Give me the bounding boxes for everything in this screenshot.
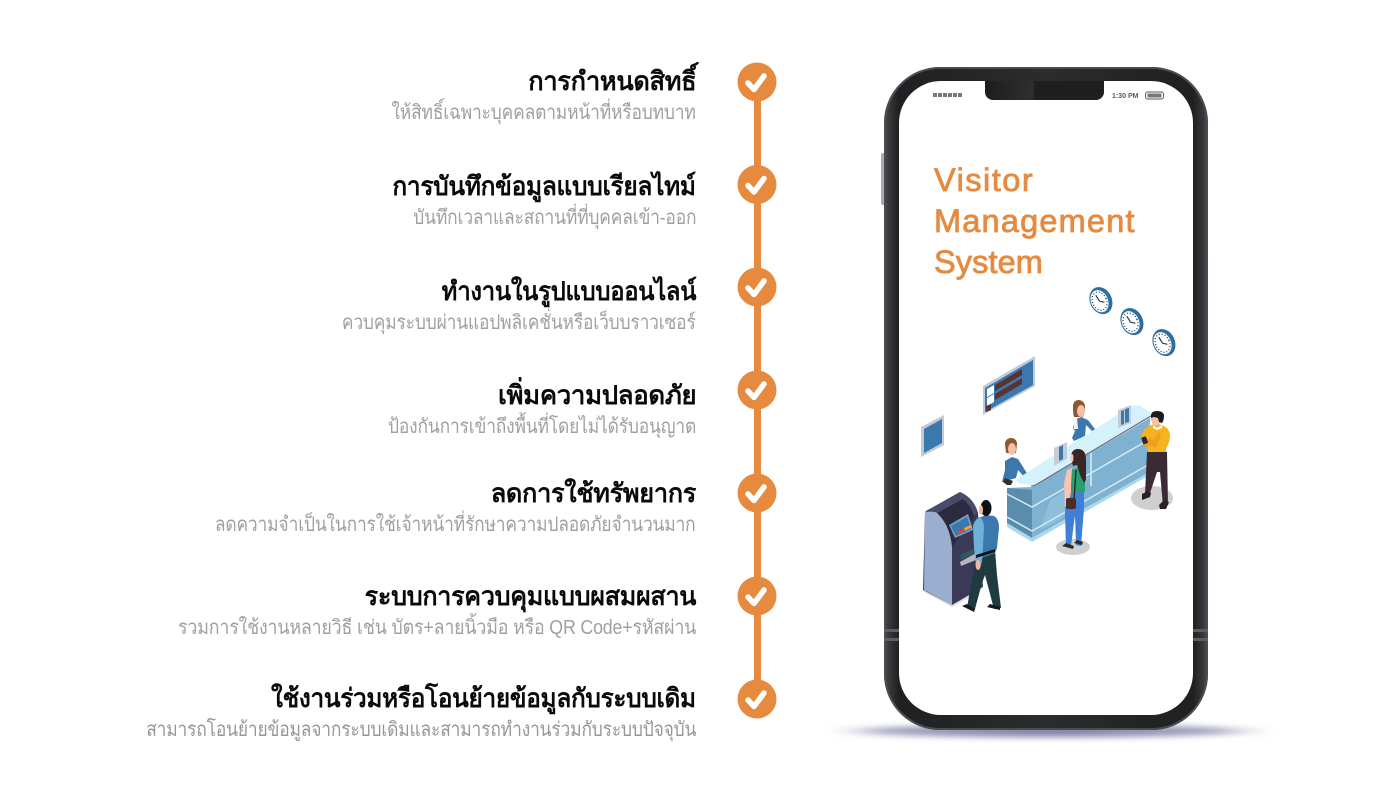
feature 2: real-time log: บันทึกเวลาและสถานที่ที่บุคคลเข้า-ออก — [413, 207, 696, 229]
feature 2: real-time log — [393, 171, 696, 230]
wall picture — [921, 415, 944, 457]
check icon 6 — [738, 576, 776, 616]
check icon 1 — [738, 62, 776, 102]
phone mockup — [881, 67, 1208, 730]
feature 7: integration — [146, 682, 696, 742]
signal dots — [933, 93, 962, 97]
desk sign right — [1118, 405, 1131, 428]
phone body — [884, 67, 1208, 730]
check icon 4 — [738, 370, 776, 410]
timeline with check icons — [738, 62, 776, 718]
feature 1: permissions — [392, 62, 699, 124]
feature 4: security — [388, 377, 696, 438]
desk sign left — [1054, 442, 1067, 466]
battery — [1146, 92, 1164, 99]
feature 6: hybrid control: ระบบการควบคุมแบบผสมผสาน — [365, 581, 696, 611]
title: Management — [934, 203, 1136, 239]
clock text: 1:30 PM — [1112, 93, 1139, 100]
feature list — [146, 62, 699, 742]
feature 5: resources: ลดความจำเป็นในการใช้เจ้าหน้าที่รักษาความปลอดภัยจำนวนมาก — [215, 514, 696, 536]
man at kiosk — [962, 500, 1001, 612]
feature 7: integration: สามารถโอนย้ายข้อมูลจากระบบเดิมและสามารถทำงานร่วมกับระบบปัจจุบัน — [146, 719, 696, 741]
woman in green top — [1056, 449, 1090, 555]
check icon 3 — [738, 268, 776, 306]
phone shadow — [822, 723, 1278, 739]
clock 2 — [1116, 304, 1148, 339]
feature 6: hybrid control — [178, 581, 696, 639]
clock 3 — [1148, 325, 1180, 360]
feature 3: online — [342, 276, 696, 334]
feature 4: security: ป้องกันการเข้าถึงพื้นที่โดยไม่ได้รับอนุญาต — [388, 416, 696, 438]
feature 2: real-time log: การบันทึกข้อมูลแบบเรียลไทม์ — [393, 171, 696, 201]
wall information board — [983, 356, 1035, 415]
kiosk machine — [922, 492, 983, 607]
feature 1: permissions: ให้สิทธิ์เฉพาะบุคคลตามหน้าที่หรือบทบาท — [392, 102, 696, 124]
reception illustration — [921, 283, 1180, 612]
receptionist front — [1002, 438, 1030, 485]
reception desk — [1007, 405, 1152, 542]
side button — [881, 153, 886, 205]
feature 5: resources: ลดการใช้ทรัพยากร — [491, 478, 696, 508]
notch — [985, 81, 1104, 100]
feature 3: online: ทำงานในรูปแบบออนไลน์ — [441, 276, 696, 306]
feature 7: integration: ใช้งานร่วมหรือโอนย้ายข้อมูลกับระบบเดิม — [271, 683, 696, 713]
check icon 7 — [738, 680, 776, 718]
phone screen — [899, 81, 1193, 715]
title: Visitor — [934, 162, 1034, 198]
man in yellow sweater — [1131, 411, 1173, 510]
clock 1 — [1085, 283, 1117, 318]
feature 6: hybrid control: รวมการใช้งานหลายวิธี เช่น บัตร+ลายนิ้วมือ หรือ QR Code+รหัสผ่าน — [178, 617, 696, 639]
phone rim highlight — [885, 68, 1207, 729]
timeline line — [754, 82, 761, 699]
check icon 5 — [738, 474, 776, 512]
feature 5: resources — [215, 478, 696, 536]
feature 3: online: ควบคุมระบบผ่านแอปพลิเคชั่นหรือเว็บบราวเซอร์ — [342, 312, 696, 334]
title: System — [934, 244, 1043, 280]
feature 1: permissions: การกำหนดสิทธิ์ — [528, 66, 696, 96]
antenna bands — [884, 629, 1208, 641]
receptionist back — [1072, 400, 1098, 441]
check icon 2 — [738, 165, 776, 204]
feature 4: security: เพิ่มความปลอดภัย — [498, 380, 696, 410]
title — [934, 162, 1136, 280]
